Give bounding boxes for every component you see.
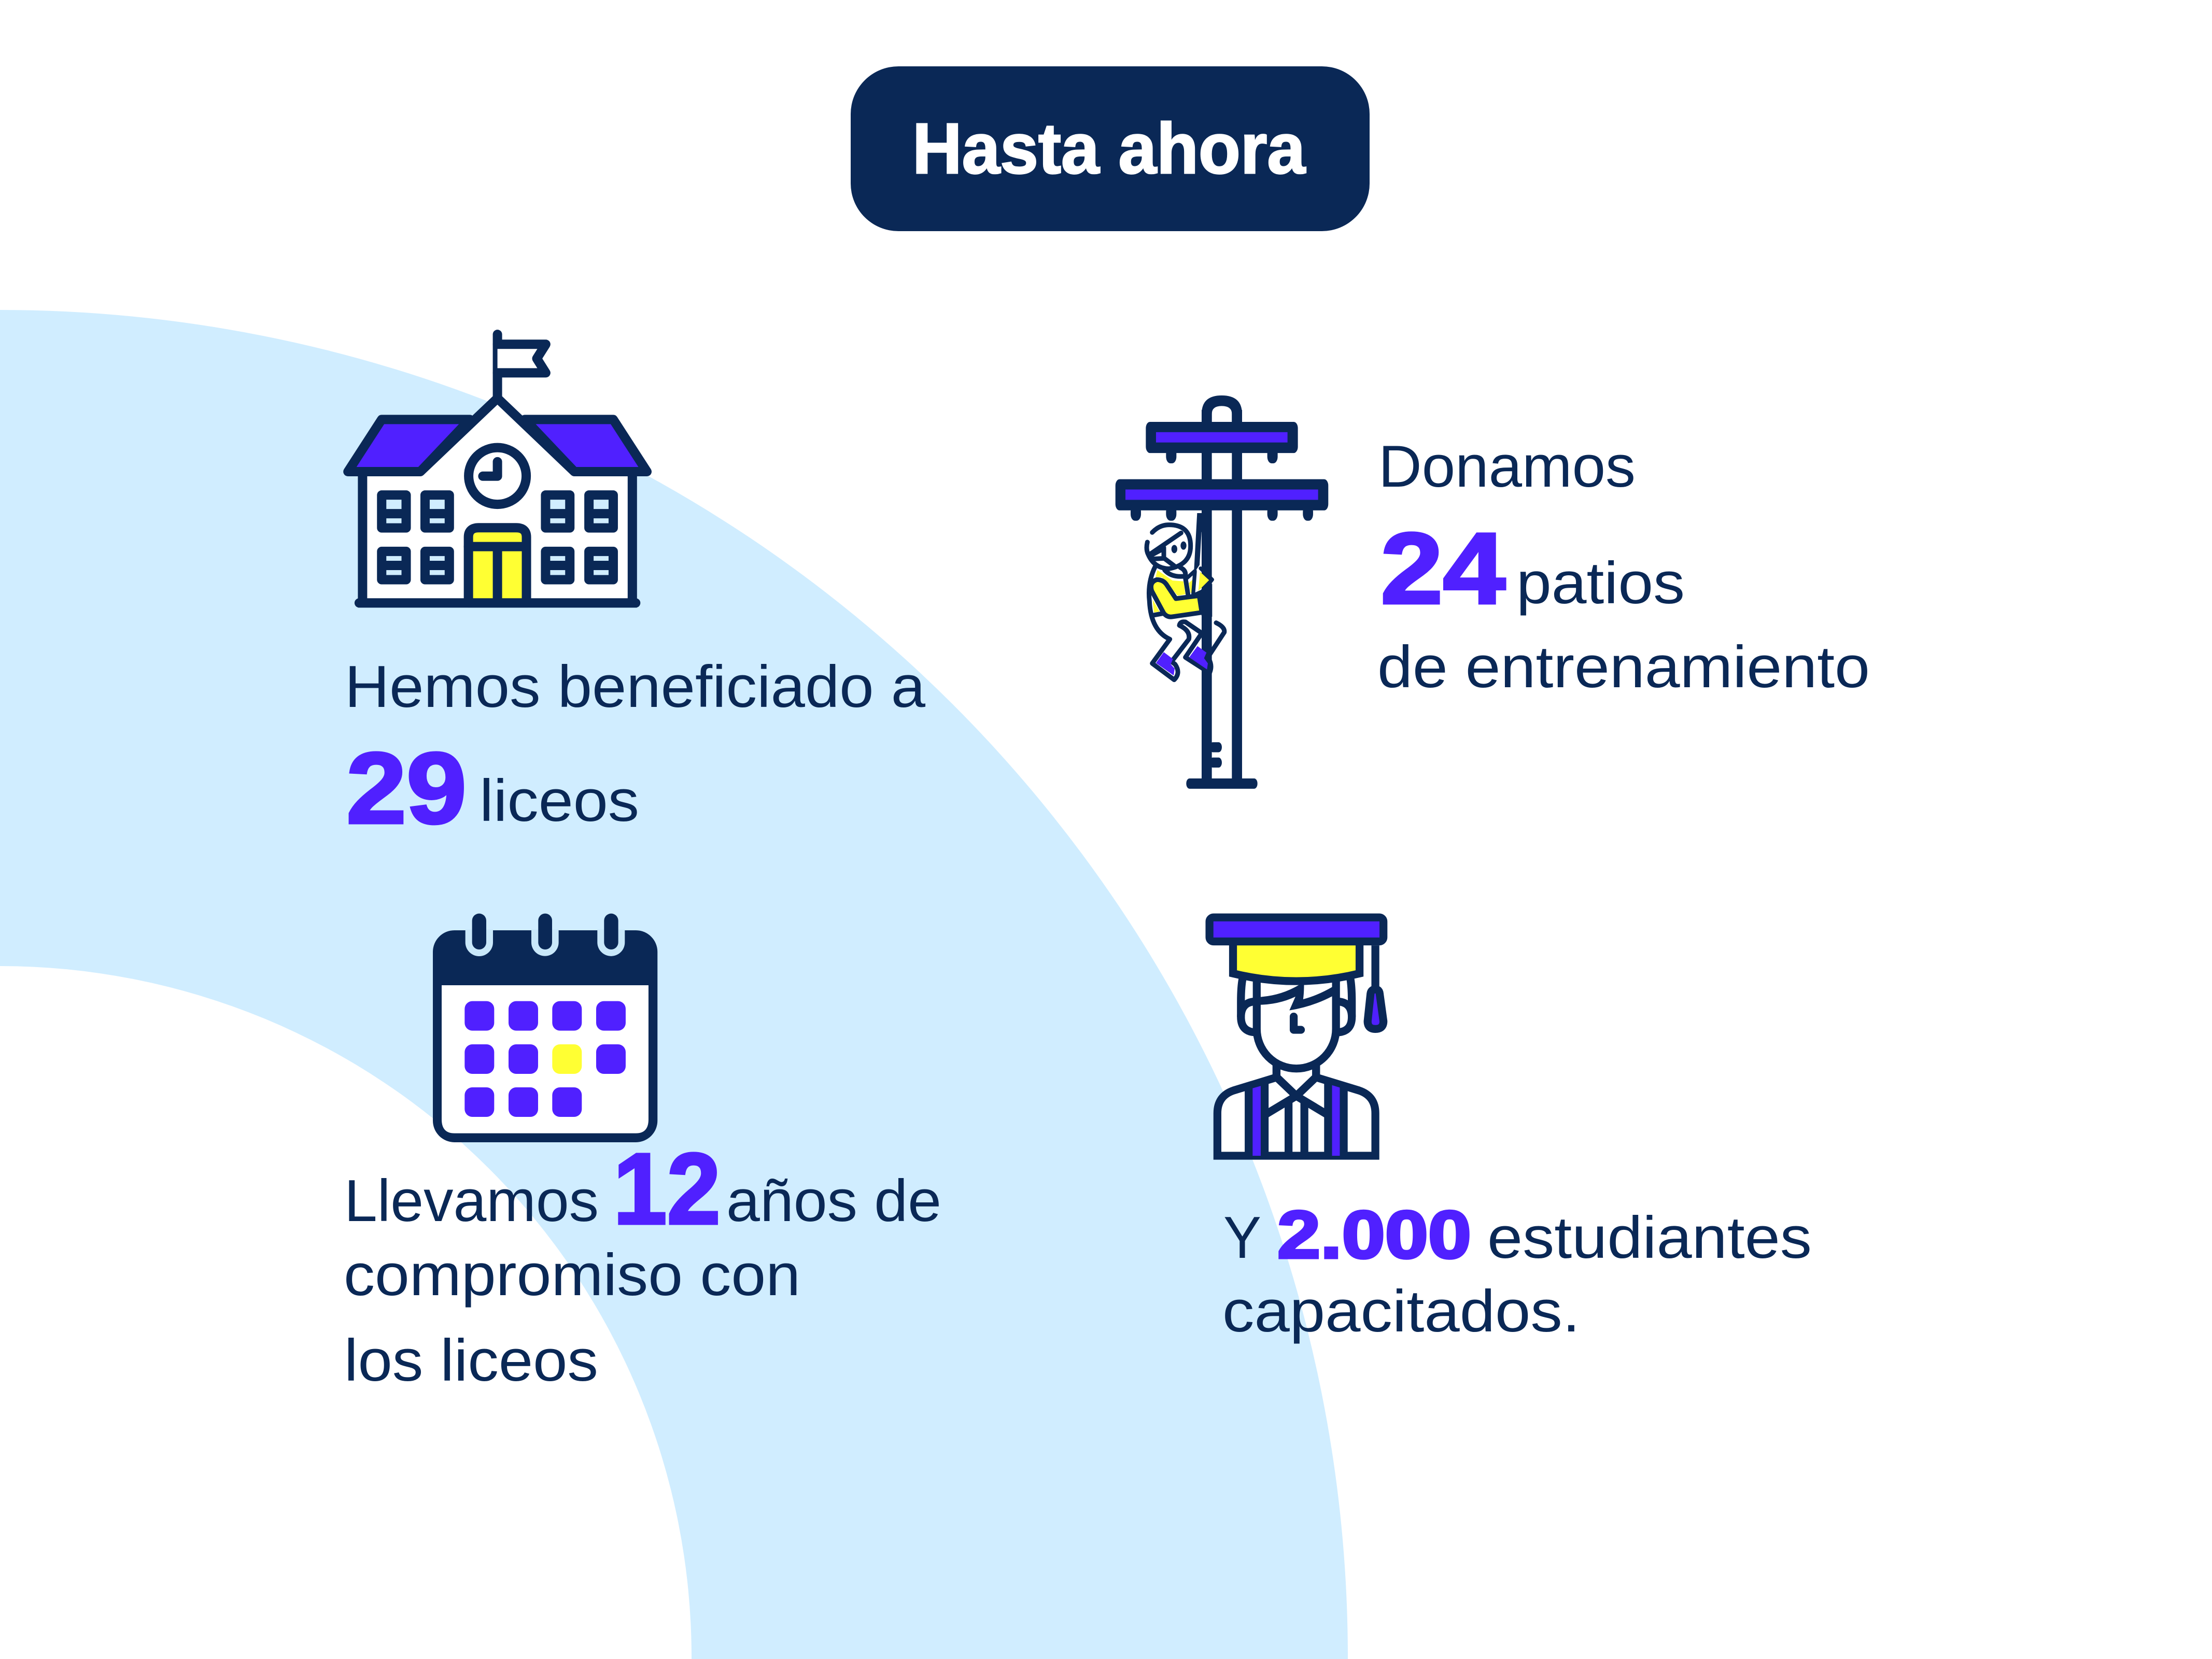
title [851,66,1370,231]
text: estudiantes [1222,1197,1812,1344]
icon: calendar [433,914,657,1142]
text: hemos beneficiado [345,654,926,845]
text: estudiantes: Y [1223,1205,1261,1271]
text: llevamos: 12 [613,1132,721,1245]
title: Hasta ahora [912,109,1306,189]
text: estudiantes: 2.000 [1277,1197,1471,1272]
text: donamos: patios [1516,550,1685,616]
icon: school [348,334,647,603]
text: donamos: Donamos [1378,434,1636,500]
text: llevamos: compromiso con [344,1242,800,1308]
background arc [0,310,1348,1659]
text: hemos beneficiado: 29 [346,732,467,845]
text: hemos beneficiado: Hemos beneficiado a [345,654,926,720]
icon: utility pole with worker [1116,395,1328,789]
text: llevamos [344,1132,941,1394]
icon: graduate [1209,917,1384,1156]
text: donamos [1377,434,1870,700]
text: estudiantes: capacitados. [1222,1279,1580,1344]
text: donamos: 24 [1380,512,1505,625]
text: estudiantes: estudiantes [1487,1205,1812,1271]
text: donamos: de entrenamiento [1377,634,1870,700]
worker figure [1147,513,1224,680]
text: llevamos: años de [726,1168,941,1234]
text: hemos beneficiado: liceos [480,768,639,834]
text: llevamos: los liceos [344,1328,598,1394]
text: llevamos: Llevamos [344,1168,599,1234]
